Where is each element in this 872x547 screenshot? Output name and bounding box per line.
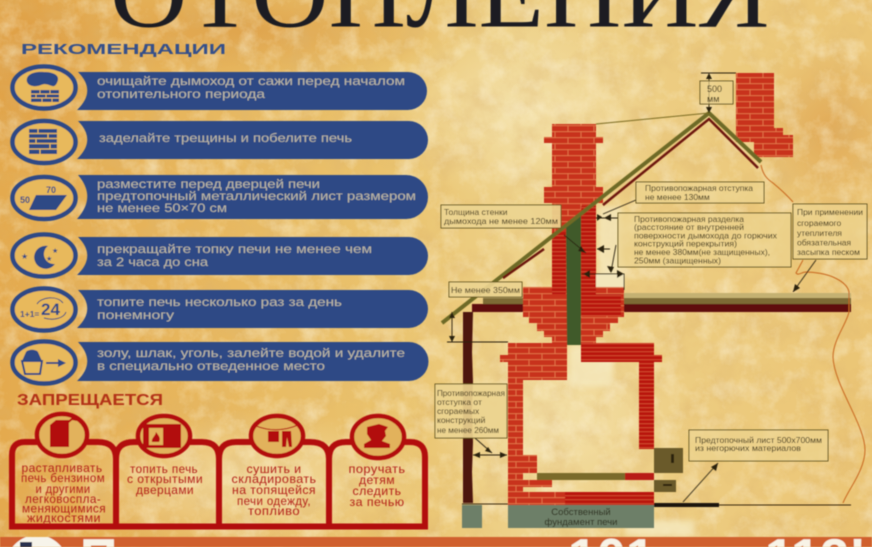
recommendation 6: ash disposal <box>12 342 428 384</box>
recommendation 3: metal sheet <box>12 175 428 219</box>
forbidden 3: drying clothes: топливо <box>248 504 300 518</box>
forbidden 1: petrol: растапливать <box>22 461 102 475</box>
wall foundation <box>462 505 482 528</box>
label: combustible insulation <box>793 204 867 259</box>
recommendation 2: seal cracks: заделайте трещины и побелите печь <box>99 131 352 145</box>
recommendation 5: fire in small portions: топите печь несколько раз за день <box>97 295 342 309</box>
grate <box>537 473 625 480</box>
label: clearance 260 mm: отступка от <box>437 397 482 407</box>
recommendation 3: metal sheet: не менее 50×70 см <box>97 201 227 215</box>
timber wall <box>463 312 473 503</box>
label: fire break: Противопожарная разделка <box>634 214 744 224</box>
forbidden 3: drying clothes <box>232 416 316 518</box>
recommendation 3: metal sheet: 70 <box>46 185 56 195</box>
label: clearance 260 mm: конструкций <box>437 415 486 425</box>
grate end <box>625 473 654 480</box>
roof <box>442 113 761 323</box>
recommendation 6: ash disposal: в специально отведенное место <box>97 359 325 373</box>
recommendation 3: metal sheet: предтопочный металлический лист размером <box>97 189 416 203</box>
stove foundation: фундамент печи <box>545 517 617 528</box>
ground line <box>462 503 851 507</box>
label: combustible insulation: утеплителя <box>797 228 842 238</box>
label: wall thickness: Толщина стенки <box>444 207 508 217</box>
recommendation 6: ash disposal: золу, шлак, уголь, залейте водой и удалите <box>97 346 405 360</box>
stove right masonry <box>581 343 662 449</box>
forbidden 2: open door <box>127 416 203 497</box>
label: fire break: не менее 380мм(не защищенных), <box>634 247 770 257</box>
forbidden 2: open door: топить печь <box>130 462 198 476</box>
panel: forbidden frame <box>9 442 428 526</box>
recommendation 4: stop firing before sleep: ★ <box>21 252 28 261</box>
forbidden 2: open door: дверцами <box>136 483 194 497</box>
forbidden 1: petrol: легковоспла- <box>25 492 101 506</box>
forbidden 1: petrol: меняющимися <box>22 502 106 516</box>
recommendation 5: fire in small portions: понемногу <box>97 308 174 322</box>
forbidden 4: children: за печью <box>350 495 404 509</box>
heading: forbidden: ЗАПРЕЩАЕТСЯ <box>17 392 163 409</box>
label: clearance 260 mm: сгораемых <box>437 406 480 416</box>
label: clearance 260 mm: не менее 260мм <box>437 425 499 435</box>
ash door <box>654 480 676 492</box>
main chimney <box>523 124 624 343</box>
recommendation 4: stop firing before sleep: ★ <box>46 255 52 263</box>
footer icon <box>6 535 68 547</box>
floor slab <box>472 293 851 312</box>
label: combustible insulation: обязательная <box>797 238 852 248</box>
forbidden 1: petrol <box>21 414 106 525</box>
heading: recommendations: РЕКОМЕНДАЦИИ <box>21 41 226 58</box>
recommendation 5: fire in small portions <box>12 288 428 330</box>
forbidden 3: drying clothes: печи одежду, <box>237 494 311 508</box>
recommendation 3: metal sheet: разместите перед дверцей печи <box>97 177 320 191</box>
label: fire break: конструкций перекрытия) <box>634 238 737 248</box>
stove hearth <box>508 492 654 505</box>
label: 500 mm <box>700 81 733 104</box>
recommendation 5: fire in small portions: 1+1= <box>20 309 39 319</box>
label: hearth sheet <box>689 430 828 461</box>
label: wall thickness: дымохода не менее 120мм <box>444 216 558 226</box>
forbidden 4: children: поручать <box>348 462 406 476</box>
insulation lead line <box>761 165 865 503</box>
forbidden 1: petrol: жидкостями <box>27 511 101 525</box>
flue <box>566 216 581 345</box>
label: fire break <box>618 213 791 267</box>
label: fire break: 250мм (защищенных) <box>634 256 721 266</box>
label: wall thickness <box>441 205 561 228</box>
forbidden 1: petrol: и другими <box>36 482 90 496</box>
label: fire break: (расстояние от внутренней <box>634 222 744 232</box>
forbidden 3: drying clothes: сушить и <box>246 462 302 476</box>
stove foundation <box>508 505 654 528</box>
label: clearance 130 mm <box>636 182 764 203</box>
label: clearance 130 mm: Противопожарная отступка <box>645 183 753 193</box>
label: hearth sheet: из негорючих материалов <box>695 443 801 453</box>
forbidden 4: children <box>348 416 406 509</box>
footer bar <box>0 529 872 547</box>
forbidden 2: open door: с открытыми <box>127 472 203 486</box>
label: clearance 260 mm: Противопожарная <box>437 388 505 398</box>
recommendation 2: seal cracks <box>12 121 428 163</box>
label: combustible insulation: засыпка песком <box>797 247 860 257</box>
label: 350 mm <box>449 282 522 297</box>
label: combustible insulation: сгораемого <box>797 218 842 228</box>
recommendation 1: clean the chimney: отопительного периода <box>97 87 265 101</box>
recommendation 4: stop firing before sleep: прекращайте топку печи не менее чем <box>97 242 372 256</box>
recommendation 4: stop firing before sleep <box>12 234 428 276</box>
label: 500 mm: мм <box>707 94 719 104</box>
forbidden 3: drying clothes: складировать <box>232 472 316 486</box>
label: combustible insulation: При применении <box>797 207 863 217</box>
stove foundation: Собственный <box>551 507 611 518</box>
label: 350 mm: Не менее 350мм <box>451 285 520 295</box>
forbidden 4: children: детям <box>359 473 395 487</box>
recommendation 4: stop firing before sleep: за 2 часа до сна <box>97 255 208 269</box>
recommendation 3: metal sheet: 50 <box>20 195 30 205</box>
dimension arrows <box>447 200 816 502</box>
recommendation 5: fire in small portions: 24 <box>41 300 60 319</box>
stove upper masonry <box>500 343 567 492</box>
forbidden 3: drying clothes: на топящейся <box>232 483 316 497</box>
pale step beside chimney <box>596 274 624 287</box>
ridge chimney <box>736 73 793 157</box>
recommendation 1: clean the chimney <box>12 66 427 110</box>
label: fire break: поверхности дымохода до горючих <box>634 230 778 240</box>
label: clearance 130 mm: не менее 130мм <box>645 192 710 202</box>
label: 500 mm: 500 <box>707 84 722 94</box>
forbidden 1: petrol: печь бензином <box>21 471 105 485</box>
recommendation 1: clean the chimney: очищайте дымоход от сажи перед началом <box>97 74 405 88</box>
chimney diagram <box>435 73 867 528</box>
recommendation 4: stop firing before sleep: ★ <box>52 247 58 255</box>
label: clearance 260 mm <box>435 384 507 438</box>
label: hearth sheet: Предтопочный лист 500х700мм <box>695 435 822 445</box>
height dimension <box>701 73 736 113</box>
forbidden 4: children: следить <box>352 484 402 498</box>
furnace door <box>654 448 683 473</box>
chimney inner dark brick <box>552 206 621 316</box>
